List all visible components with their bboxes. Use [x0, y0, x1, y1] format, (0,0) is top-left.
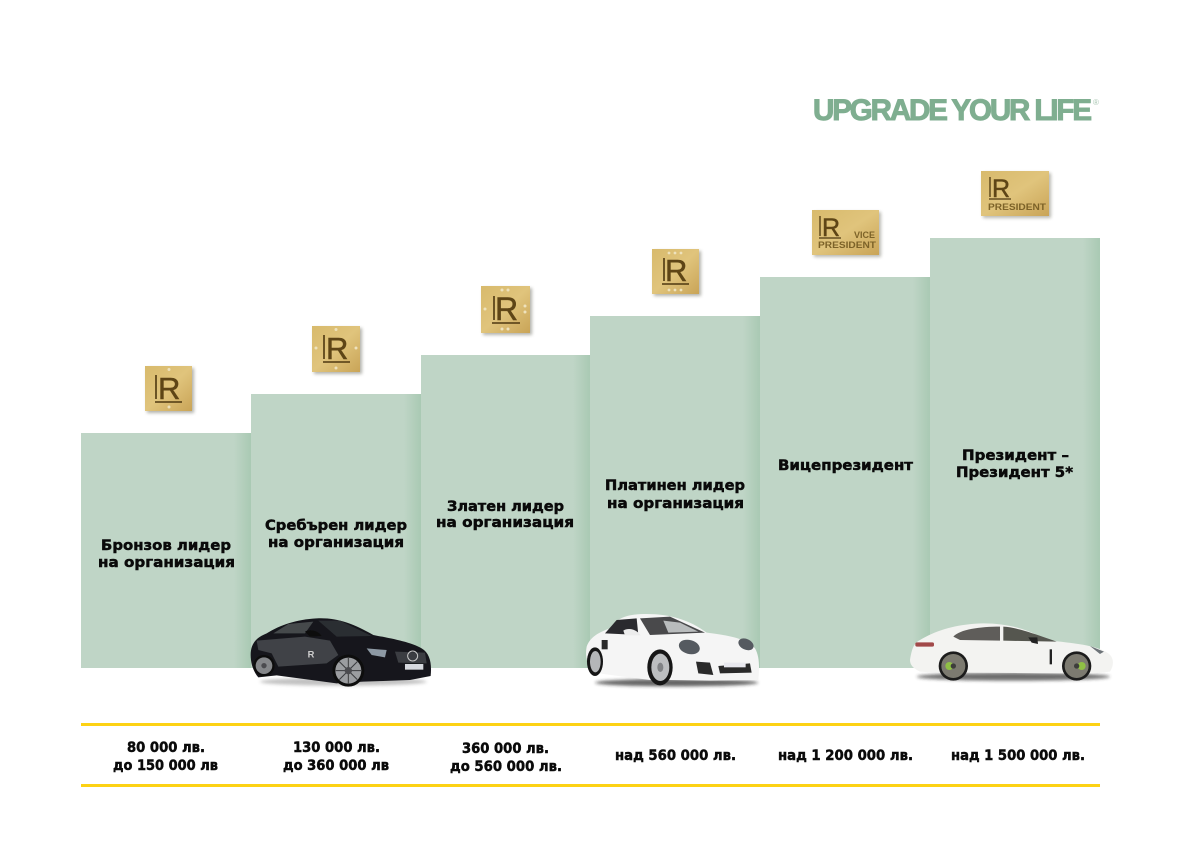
label: gold leader: Златен лидер: [447, 499, 564, 515]
car: white Porsche 911: [586, 614, 759, 686]
badge: president: R: [992, 175, 1010, 203]
label: gold leader: [436, 499, 574, 531]
bar: platinum: [590, 316, 760, 668]
amount: bronze: 80 000 лв.: [127, 740, 205, 756]
bar: bronze: [81, 433, 251, 668]
yellow rule: top: [81, 723, 1100, 726]
amount: silver: до 360 000 лв: [283, 758, 389, 774]
car: white Panamera: [910, 623, 1113, 681]
label: gold leader: на организация: [436, 515, 574, 531]
label: platinum leader: Платинен лидер: [605, 478, 745, 494]
logo: Upgrade Your Life: ®: [1093, 98, 1099, 107]
badge: silver: [312, 326, 362, 374]
label: silver leader: [265, 518, 407, 551]
label: president: Президент –: [962, 448, 1069, 464]
amount: gold: 360 000 лв.: [462, 741, 549, 757]
label: silver leader: на организация: [268, 535, 404, 551]
amount: gold: до 560 000 лв.: [450, 759, 562, 775]
bar: vice president: [760, 277, 930, 668]
amount: silver: 130 000 лв.: [293, 740, 380, 756]
amount: gold: [450, 741, 562, 775]
label: president: [956, 448, 1073, 481]
car: black coupe: [251, 618, 431, 687]
amount: platinum: над 560 000 лв.: [615, 748, 736, 764]
stepped bar chart: [81, 238, 1100, 668]
badge: gold: R: [495, 291, 518, 327]
label: vice president: Вицепрезидент: [778, 458, 914, 474]
amount: bronze: [113, 740, 218, 774]
badge: vice president: R: [822, 214, 840, 242]
bar: silver: [251, 394, 421, 668]
label: bronze leader: [98, 538, 235, 571]
amount: bronze: до 150 000 лв: [113, 758, 218, 774]
amount: vice president: над 1 200 000 лв.: [778, 748, 913, 764]
label: platinum leader: [605, 478, 745, 512]
badge: vice president: PRESIDENT: [818, 240, 876, 251]
car: black coupe: R: [308, 649, 315, 659]
badge: president: PRESIDENT: [988, 202, 1046, 213]
badge: platinum: [652, 249, 701, 296]
logo: Upgrade Your Life: UPGRADE YOUR LIFE: [813, 94, 1092, 127]
badge: vice president: VICE: [854, 230, 875, 241]
badge: bronze: R: [158, 371, 180, 406]
badge: bronze: [145, 366, 194, 413]
label: platinum leader: на организация: [607, 496, 744, 512]
badge: silver: R: [326, 331, 348, 366]
bar: president: [930, 238, 1100, 668]
badge: vice president: [812, 210, 881, 257]
label: bronze leader: Бронзов лидер: [101, 538, 231, 554]
label: bronze leader: на организация: [98, 555, 235, 571]
amount: silver: [283, 740, 389, 774]
yellow rule: bottom: [81, 784, 1100, 787]
bar: gold: [421, 355, 590, 668]
amount: president: над 1 500 000 лв.: [951, 748, 1085, 764]
label: president: Президент 5*: [956, 465, 1073, 481]
badge: president: [981, 171, 1051, 218]
badge: platinum: R: [665, 253, 687, 288]
label: silver leader: Сребърен лидер: [265, 518, 407, 534]
badge: gold: [481, 286, 532, 335]
